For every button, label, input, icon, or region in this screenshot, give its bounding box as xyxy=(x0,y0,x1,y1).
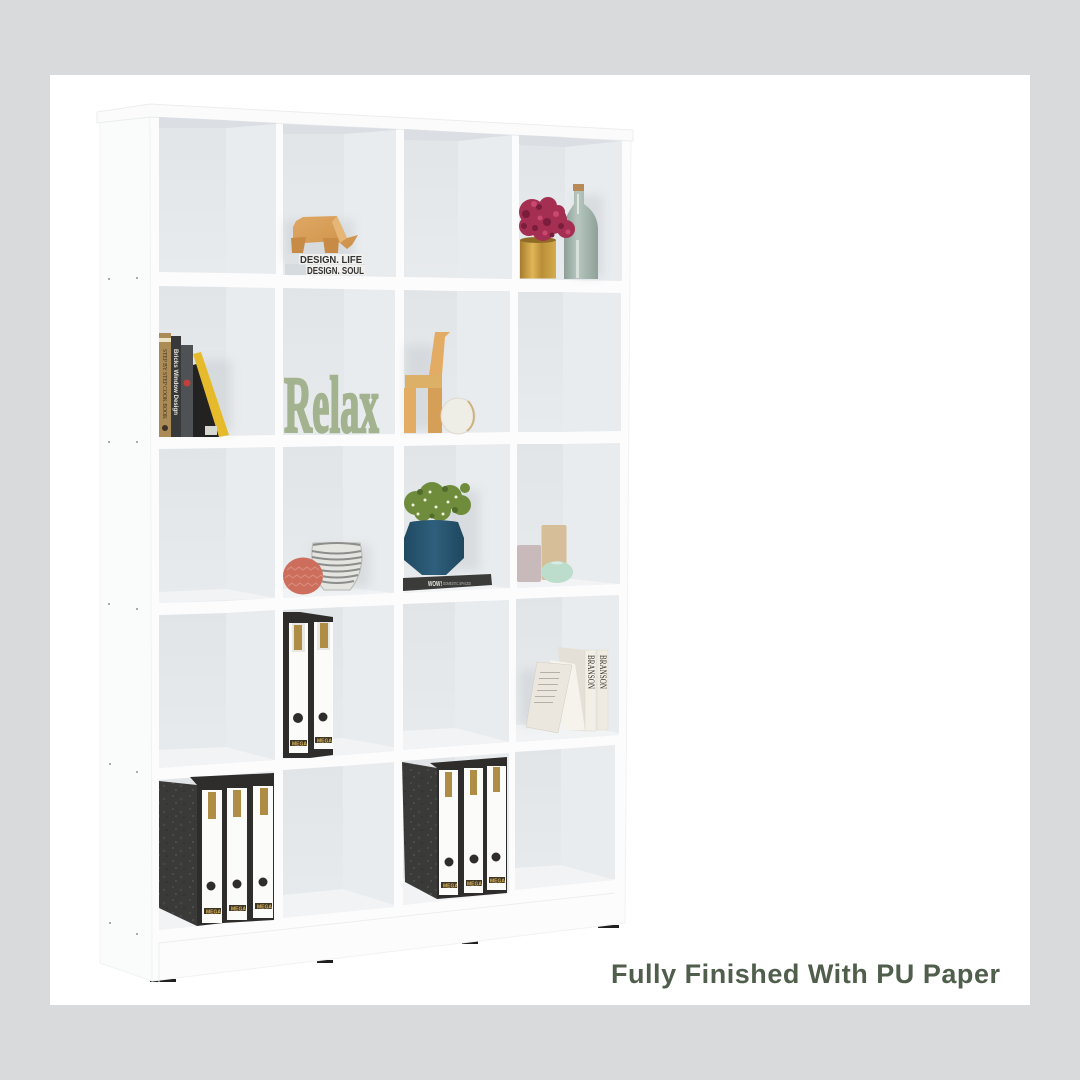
white panel xyxy=(50,75,1030,1005)
ornament: blue vase xyxy=(404,520,464,575)
binders: row 5, column 1: MEGA xyxy=(206,910,221,916)
books: Design. Life, Design. Soul: DESIGN. LIFE xyxy=(300,255,362,266)
top board xyxy=(97,104,633,141)
book: Wow under vase: WOW! xyxy=(428,581,442,588)
bookcase feet xyxy=(150,925,619,982)
row 2 cubbies xyxy=(159,286,621,437)
book: Wow under vase xyxy=(403,574,492,591)
caption: Fully Finished With PU Paper xyxy=(611,959,1000,989)
row 3 cubbies xyxy=(159,443,620,603)
binders: row 5, column 3: MEGA xyxy=(443,884,458,890)
ornament: white ball xyxy=(441,398,475,434)
binders: row 5, column 3: MEGA xyxy=(467,882,482,888)
object shadows xyxy=(190,195,603,725)
front frame xyxy=(150,117,631,981)
ornament: candles and mint pot xyxy=(517,525,573,583)
binders: row 5, column 3: MEGA xyxy=(490,878,505,884)
books: Branson stack xyxy=(526,647,608,733)
ornament: coral ball xyxy=(283,558,323,594)
infographic page: Relax xyxy=(284,362,379,450)
ornament: wooden giraffe xyxy=(404,332,450,433)
ornament: plant foliage xyxy=(404,482,471,521)
binders: row 5, column 1 xyxy=(159,773,274,926)
binders: row 5, column 1: MEGA xyxy=(257,904,272,910)
screw holes xyxy=(108,277,138,935)
binders: row 4, column 2: MEGA xyxy=(292,742,307,748)
books: left stack xyxy=(159,333,229,437)
row 1 cubbies xyxy=(159,117,622,281)
ornament: wooden rhino xyxy=(291,216,358,253)
binders: row 4, column 2: MEGA xyxy=(317,738,332,744)
books: Design. Life, Design. Soul: DESIGN. SOUL xyxy=(307,266,364,277)
books: Branson stack: BRANSON xyxy=(586,655,596,689)
ornament: green glass bottle xyxy=(564,184,598,279)
left side panel xyxy=(100,117,152,981)
bookcase xyxy=(97,104,633,982)
books: Branson stack: BRANSON xyxy=(598,655,608,689)
books: left stack: STEP BY STEP COOK BOOK xyxy=(161,349,168,419)
row 5 cubbies xyxy=(159,745,615,930)
ornament: flowers in gold vase xyxy=(519,197,575,278)
ornament: striped vase xyxy=(312,543,362,590)
books: left stack: Bricks Window Design xyxy=(172,349,178,415)
binders: row 5, column 3 xyxy=(402,757,507,899)
book: Wow under vase: DOMESTIC SPACES xyxy=(443,581,471,586)
plinth seam xyxy=(159,893,615,982)
binders: row 4, column 2 xyxy=(283,612,333,758)
row 4 cubbies xyxy=(159,595,619,768)
books: Design. Life, Design. Soul xyxy=(285,254,365,277)
binders: row 5, column 1: MEGA xyxy=(231,906,246,912)
